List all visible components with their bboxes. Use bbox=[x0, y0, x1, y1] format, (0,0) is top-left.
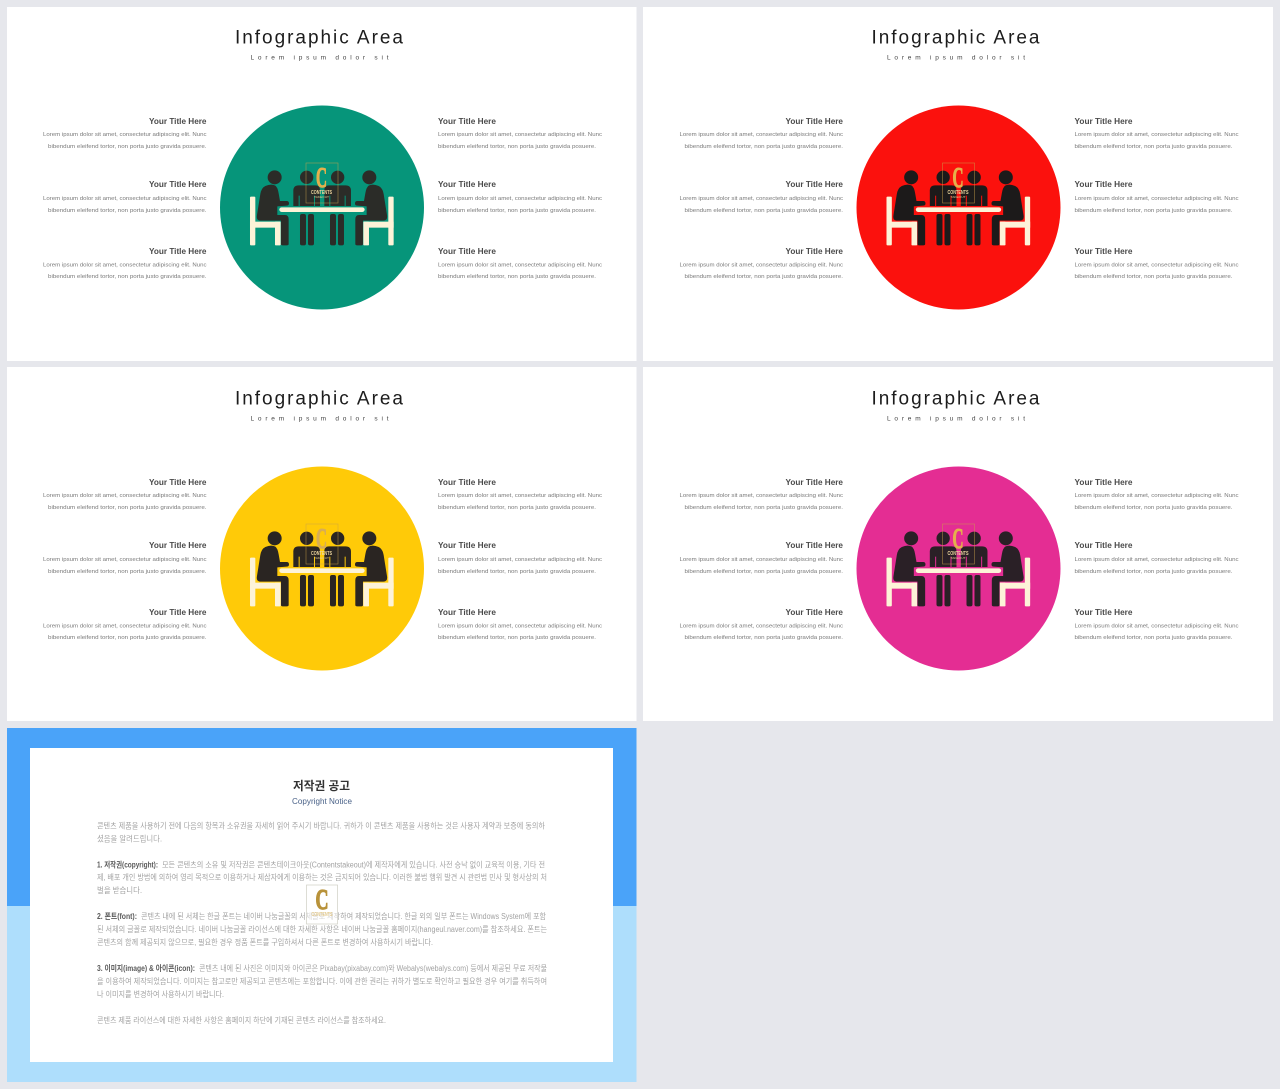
text block: right middle: Your Title Here bbox=[438, 540, 496, 550]
paragraph: font bbox=[97, 911, 547, 947]
text block: right middle: Lorem ipsum dolor sit amet, consectetur adipiscing elit. Nunc bbox=[438, 557, 602, 563]
text block: right bottom: Lorem ipsum dolor sit amet, consectetur adipiscing elit. Nunc bbox=[1074, 624, 1239, 630]
text block: right middle: bibendum eleifend tortor, non porta justo gravida posuere. bbox=[438, 208, 596, 214]
text block: left bottom: bibendum eleifend tortor, non porta justo gravida posuere. bbox=[48, 274, 207, 280]
text block: left bottom: bibendum eleifend tortor, non porta justo gravida posuere. bbox=[684, 635, 843, 641]
text block: left middle: Lorem ipsum dolor sit amet, consectetur adipiscing elit. Nunc bbox=[43, 196, 207, 202]
text block: right bottom: Your Title Here bbox=[1074, 246, 1133, 256]
watermark: TAKEOUT bbox=[950, 556, 966, 560]
text block: left middle: bibendum eleifend tortor, non porta justo gravida posuere. bbox=[684, 569, 843, 575]
watermark: C bbox=[316, 163, 327, 194]
text block: left bottom: Your Title Here bbox=[786, 607, 843, 617]
text block: right bottom: Lorem ipsum dolor sit amet, consectetur adipiscing elit. Nunc bbox=[438, 262, 602, 268]
text block: left bottom: bibendum eleifend tortor, non porta justo gravida posuere. bbox=[48, 635, 207, 641]
subheading: Lorem ipsum dolor sit bbox=[250, 416, 389, 422]
paragraph: image and icon: 을 이용하여 제작되었습니다. 이미지는 참고로만 제공되고 콘텐츠에는 포함합니다. 이에 관한 권리는 귀하가 별도로 확인하고 필요한 경우 여기를 취득하여 bbox=[97, 976, 547, 986]
paragraph: copyright bbox=[97, 860, 547, 895]
text block: left bottom bbox=[680, 607, 843, 641]
watermark: C bbox=[952, 163, 964, 194]
text block: right top: Lorem ipsum dolor sit amet, consectetur adipiscing elit. Nunc bbox=[1074, 493, 1239, 499]
paragraph: copyright: 1. 저작권(copyright): bbox=[97, 860, 158, 870]
text block: left top: Lorem ipsum dolor sit amet, consectetur adipiscing elit. Nunc bbox=[43, 132, 207, 138]
text block: left bottom bbox=[43, 246, 207, 280]
text block: left bottom: Lorem ipsum dolor sit amet, consectetur adipiscing elit. Nunc bbox=[680, 262, 843, 268]
text block: left top: Lorem ipsum dolor sit amet, consectetur adipiscing elit. Nunc bbox=[680, 493, 843, 499]
heading: Infographic Area bbox=[872, 28, 1040, 48]
panel: pink infographic slide bbox=[643, 367, 1273, 721]
text block: right top: Your Title Here bbox=[438, 477, 496, 487]
icon: meeting table bbox=[250, 531, 394, 606]
circle: green bbox=[220, 106, 424, 310]
text block: left middle bbox=[680, 540, 843, 575]
text block: left middle bbox=[680, 179, 843, 214]
text block: left middle bbox=[43, 540, 207, 575]
text block: right bottom: Lorem ipsum dolor sit amet, consectetur adipiscing elit. Nunc bbox=[1074, 262, 1239, 268]
text block: right middle: bibendum eleifend tortor, non porta justo gravida posuere. bbox=[438, 569, 596, 575]
text block: left top: Your Title Here bbox=[786, 477, 843, 487]
text block: right top: Your Title Here bbox=[438, 116, 496, 126]
text block: right middle: Lorem ipsum dolor sit amet, consectetur adipiscing elit. Nunc bbox=[1074, 196, 1239, 202]
text block: left middle: bibendum eleifend tortor, non porta justo gravida posuere. bbox=[48, 208, 207, 214]
panel: red infographic slide bbox=[643, 7, 1273, 361]
copyright heading: 저작권 공고 bbox=[293, 778, 350, 793]
circle: yellow bbox=[220, 466, 424, 670]
text block: right middle: Lorem ipsum dolor sit amet, consectetur adipiscing elit. Nunc bbox=[438, 196, 602, 202]
heading: Infographic Area bbox=[235, 388, 403, 410]
watermark: TAKEOUT bbox=[314, 556, 329, 560]
watermark: C bbox=[316, 524, 327, 555]
text block: right bottom: bibendum eleifend tortor, non porta justo gravida posuere. bbox=[438, 635, 596, 641]
text block: left middle: Lorem ipsum dolor sit amet, consectetur adipiscing elit. Nunc bbox=[43, 557, 207, 563]
text block: right top: Lorem ipsum dolor sit amet, consectetur adipiscing elit. Nunc bbox=[1074, 132, 1239, 138]
text block: right middle: bibendum eleifend tortor, non porta justo gravida posuere. bbox=[1074, 569, 1233, 575]
text block: right bottom bbox=[1074, 246, 1239, 280]
text block: left top bbox=[680, 116, 843, 150]
text block: left top bbox=[680, 477, 843, 511]
text block: left bottom: bibendum eleifend tortor, non porta justo gravida posuere. bbox=[684, 274, 843, 280]
text block: left middle: Your Title Here bbox=[149, 179, 207, 189]
copyright subheading: Copyright Notice bbox=[292, 796, 352, 806]
text block: left top: Lorem ipsum dolor sit amet, consectetur adipiscing elit. Nunc bbox=[680, 132, 843, 138]
text block: left middle: bibendum eleifend tortor, non porta justo gravida posuere. bbox=[684, 208, 843, 214]
subheading: Lorem ipsum dolor sit bbox=[887, 54, 1025, 62]
text block: left top: bibendum eleifend tortor, non porta justo gravida posuere. bbox=[48, 144, 207, 150]
text block: left top bbox=[43, 116, 207, 150]
subheading: Lorem ipsum dolor sit bbox=[887, 416, 1025, 422]
text block: right bottom: Your Title Here bbox=[1074, 607, 1133, 617]
text block: left bottom: Your Title Here bbox=[149, 607, 207, 617]
text block: right bottom: Lorem ipsum dolor sit amet, consectetur adipiscing elit. Nunc bbox=[438, 624, 602, 630]
icon: meeting table bbox=[886, 531, 1030, 606]
heading: Infographic Area bbox=[235, 28, 403, 48]
watermark: C bbox=[316, 885, 328, 916]
watermark bbox=[306, 524, 338, 564]
intro paragraph: 셨음을 알려드립니다. bbox=[97, 834, 162, 844]
text block: left bottom: Your Title Here bbox=[149, 246, 207, 256]
text block: left top: Your Title Here bbox=[786, 116, 843, 126]
watermark bbox=[942, 163, 974, 203]
text block: right top: bibendum eleifend tortor, non porta justo gravida posuere. bbox=[438, 505, 596, 511]
paragraph: copyright: 모든 콘텐츠의 소유 및 저작권은 콘텐츠테이크아웃(Contentstakeout)에 제작자에게 있습니다. 사전 승낙 없이 교육적 이용, 기타 전 bbox=[162, 860, 545, 870]
text block: right top: bibendum eleifend tortor, non porta justo gravida posuere. bbox=[438, 144, 596, 150]
text block: right bottom: Your Title Here bbox=[438, 246, 496, 256]
text block: right top: Lorem ipsum dolor sit amet, consectetur adipiscing elit. Nunc bbox=[438, 493, 602, 499]
text block: left middle: Your Title Here bbox=[149, 540, 207, 550]
text block: right top bbox=[438, 116, 602, 150]
watermark: TAKEOUT bbox=[314, 195, 329, 199]
text block: right bottom bbox=[438, 607, 602, 641]
watermark: CONTENTS bbox=[311, 190, 333, 196]
text block: left bottom: Your Title Here bbox=[786, 246, 843, 256]
text block: right middle bbox=[1074, 540, 1239, 575]
closing line: 콘텐츠 제품 라이선스에 대한 자세한 사항은 홈페이지 하단에 기재된 콘텐츠 라이선스를 참조하세요. bbox=[97, 1015, 386, 1025]
circle: red bbox=[856, 106, 1060, 310]
text block: left top: Lorem ipsum dolor sit amet, consectetur adipiscing elit. Nunc bbox=[43, 493, 207, 499]
text block: right middle bbox=[1074, 179, 1239, 214]
text block: left middle: Lorem ipsum dolor sit amet, consectetur adipiscing elit. Nunc bbox=[680, 196, 843, 202]
subheading: Lorem ipsum dolor sit bbox=[250, 54, 389, 62]
watermark bbox=[942, 524, 974, 564]
text block: left top: bibendum eleifend tortor, non porta justo gravida posuere. bbox=[684, 144, 843, 150]
text block: right middle: Your Title Here bbox=[1074, 179, 1133, 189]
text block: right bottom bbox=[1074, 607, 1239, 641]
watermark: CONTENTS bbox=[312, 912, 333, 918]
text block: right top bbox=[1074, 477, 1239, 511]
paragraph: copyright: 제, 배포 개인 방법에 의하여 영리 목적으로 이용하거나 제삼자에게 이용하는 것은 금지되어 있습니다. 이러한 불법 행위 발견 시 관련법 민사 및 형사상의 처 bbox=[97, 872, 547, 882]
icon: meeting table bbox=[886, 170, 1030, 245]
text block: left bottom: Lorem ipsum dolor sit amet, consectetur adipiscing elit. Nunc bbox=[43, 624, 207, 630]
text block: right bottom: bibendum eleifend tortor, non porta justo gravida posuere. bbox=[1074, 274, 1233, 280]
text block: right bottom: bibendum eleifend tortor, non porta justo gravida posuere. bbox=[438, 274, 596, 280]
watermark: CONTENTS bbox=[948, 551, 969, 557]
text block: left bottom: Lorem ipsum dolor sit amet, consectetur adipiscing elit. Nunc bbox=[43, 262, 207, 268]
text block: right top bbox=[438, 477, 602, 511]
text block: right middle bbox=[438, 540, 602, 575]
text block: right middle: Your Title Here bbox=[438, 179, 496, 189]
watermark: C bbox=[952, 524, 964, 555]
intro paragraph bbox=[97, 820, 546, 844]
paragraph: font: 콘텐츠의 함께 제공되지 않으므로, 필요한 경우 정품 폰트를 구입하셔서 다른 폰트로 변경하여 사용하시기 바랍니다. bbox=[97, 937, 433, 947]
paragraph: font: 콘텐츠 내에 된 서체는 한글 폰트는 네이버 나눔글꼴의 서체들로 제작하여 제작되었습니다. 한글 외의 일부 폰트는 Windows System에 포함 bbox=[141, 911, 547, 921]
paragraph: image and icon bbox=[97, 963, 547, 999]
text block: left top: bibendum eleifend tortor, non porta justo gravida posuere. bbox=[684, 505, 843, 511]
text block: right top: Your Title Here bbox=[1074, 477, 1133, 487]
watermark: TAKEOUT bbox=[950, 195, 966, 199]
watermark: CONTENTS bbox=[948, 190, 969, 196]
text block: right top: bibendum eleifend tortor, non porta justo gravida posuere. bbox=[1074, 505, 1233, 511]
circle: pink bbox=[856, 466, 1060, 670]
text block: right top: bibendum eleifend tortor, non porta justo gravida posuere. bbox=[1074, 144, 1233, 150]
text block: left middle: bibendum eleifend tortor, non porta justo gravida posuere. bbox=[48, 569, 207, 575]
panel: green infographic slide bbox=[7, 7, 636, 361]
text block: right middle: Lorem ipsum dolor sit amet, consectetur adipiscing elit. Nunc bbox=[1074, 557, 1239, 563]
text block: right top: Your Title Here bbox=[1074, 116, 1133, 126]
panel: copyright notice slide bbox=[7, 728, 636, 1082]
text block: right bottom: Your Title Here bbox=[438, 607, 496, 617]
text block: left middle: Lorem ipsum dolor sit amet, consectetur adipiscing elit. Nunc bbox=[680, 557, 843, 563]
text block: left bottom bbox=[43, 607, 207, 641]
paragraph: font: 2. 폰트(font): bbox=[97, 912, 137, 921]
text block: left top: Your Title Here bbox=[149, 477, 207, 487]
watermark bbox=[306, 885, 338, 924]
paragraph: image and icon: 나 이미지를 변경하여 사용하시기 바랍니다. bbox=[97, 989, 224, 999]
text block: right bottom: bibendum eleifend tortor, non porta justo gravida posuere. bbox=[1074, 635, 1233, 641]
text block: left top bbox=[43, 477, 207, 511]
icon: meeting table bbox=[250, 170, 394, 245]
text block: right middle bbox=[438, 179, 602, 214]
paragraph: font: 된 서체의 글꼴로 제작되었습니다. 네이버 나눔글꼴 라이선스에 대한 자세한 사항은 네이버 나눔글꼴 홈페이지(hangeul.naver.com)를 참조하세요. 폰트는 bbox=[97, 924, 547, 934]
text block: right bottom bbox=[438, 246, 602, 280]
text block: right middle: Your Title Here bbox=[1074, 540, 1133, 550]
paragraph: copyright: 벌을 받습니다. bbox=[97, 885, 142, 895]
text block: left bottom: Lorem ipsum dolor sit amet, consectetur adipiscing elit. Nunc bbox=[680, 624, 843, 630]
intro paragraph: 콘텐츠 제품을 사용하기 전에 다음의 항목과 소유권을 자세히 읽어 주시기 바랍니다. 귀하가 이 콘텐츠 제품을 사용하는 것은 사용자 계약과 보증에 동의하 bbox=[97, 820, 546, 830]
text block: right middle: bibendum eleifend tortor, non porta justo gravida posuere. bbox=[1074, 208, 1233, 214]
paragraph: image and icon: 콘텐츠 내에 된 사진은 이미지와 아이콘은 Pixabay(pixabay.com)와 Webalys(webalys.com) 등에서 제공된 무료 저작물 bbox=[199, 963, 547, 973]
text block: left top: bibendum eleifend tortor, non porta justo gravida posuere. bbox=[48, 505, 207, 511]
panel: yellow infographic slide bbox=[7, 367, 636, 721]
text block: left middle bbox=[43, 179, 207, 214]
text block: right top: Lorem ipsum dolor sit amet, consectetur adipiscing elit. Nunc bbox=[438, 132, 602, 138]
watermark bbox=[306, 163, 338, 203]
watermark: CONTENTS bbox=[311, 551, 333, 557]
heading: Infographic Area bbox=[872, 388, 1040, 410]
text block: right top bbox=[1074, 116, 1239, 150]
text block: left middle: Your Title Here bbox=[786, 540, 843, 550]
text block: left middle: Your Title Here bbox=[786, 179, 843, 189]
text block: left bottom bbox=[680, 246, 843, 280]
paragraph: image and icon: 3. 이미지(image) & 아이콘(icon): bbox=[97, 963, 195, 973]
text block: left top: Your Title Here bbox=[149, 116, 207, 126]
